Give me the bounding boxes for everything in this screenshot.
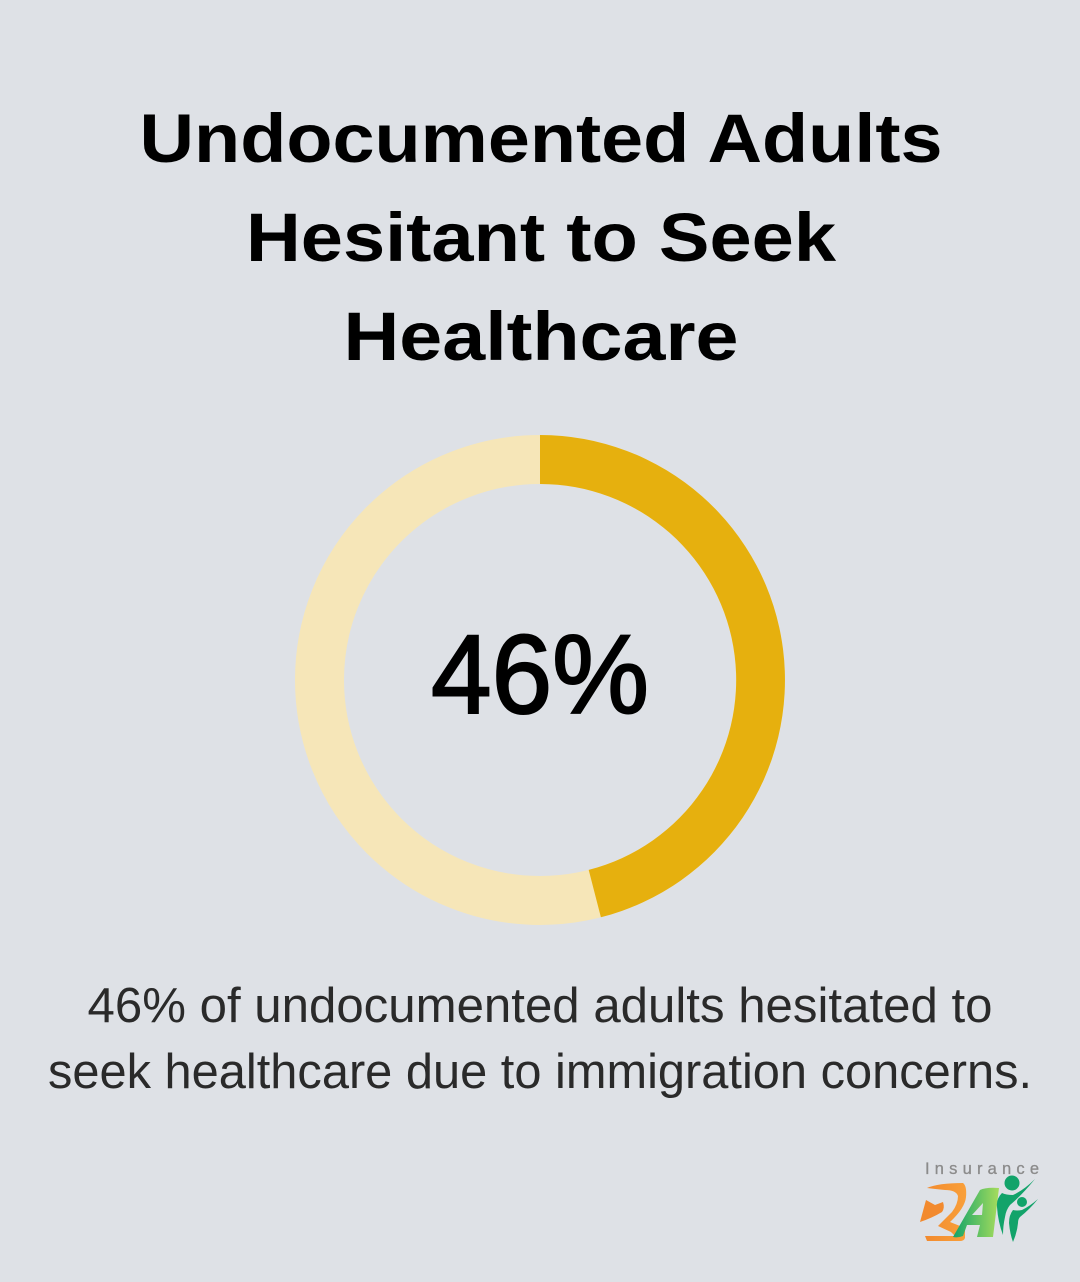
logo green A — [953, 1188, 999, 1237]
title: Hesitant to Seek — [246, 199, 837, 276]
donut center value: 46% — [431, 612, 649, 737]
logo figure small — [1009, 1197, 1038, 1242]
title: Healthcare — [344, 298, 738, 375]
title — [140, 100, 942, 375]
donut chart: 46% — [320, 435, 785, 917]
description text: seek healthcare due to immigration concerns. — [48, 1045, 1032, 1099]
logo orange heart — [920, 1200, 944, 1222]
donut value arc — [540, 435, 785, 917]
description text — [48, 979, 1032, 1099]
logo figure large — [997, 1176, 1035, 1235]
title: Undocumented Adults — [140, 100, 942, 177]
logo orange 2 — [925, 1183, 966, 1241]
logo wordmark: Insurance — [925, 1160, 1039, 1178]
logo: Insurance 2A — [920, 1160, 1039, 1242]
donut track — [320, 460, 760, 900]
description text: 46% of undocumented adults hesitated to — [88, 979, 992, 1033]
